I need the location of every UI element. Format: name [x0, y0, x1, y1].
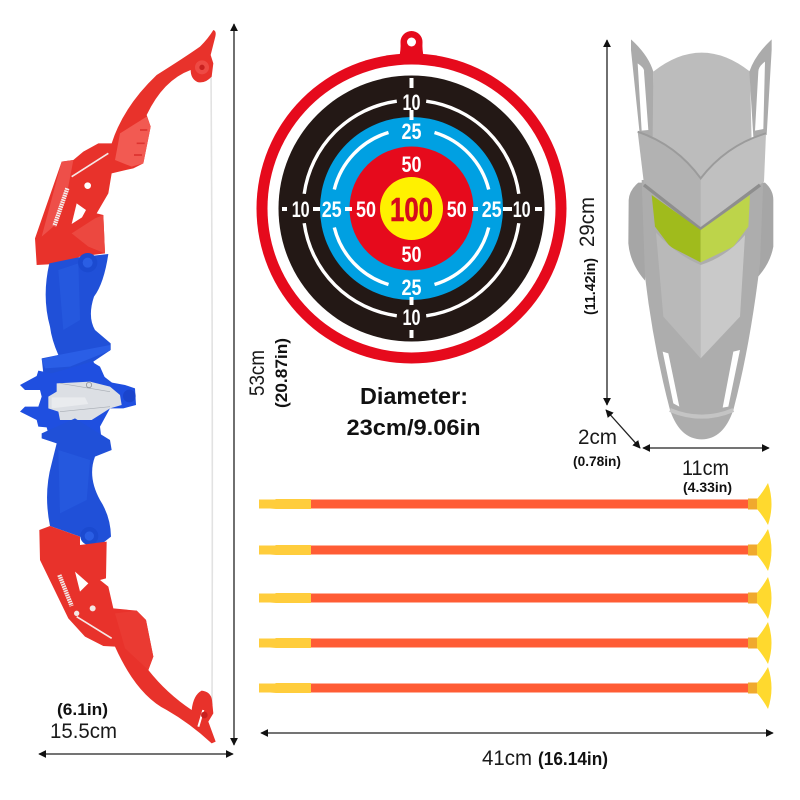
quiver tail band — [670, 410, 733, 417]
arrow: bow height — [233, 24, 235, 745]
label: 16.14in: (16.14in) — [538, 749, 608, 769]
dimension: bow width — [39, 700, 233, 754]
bow lower limb — [39, 526, 216, 743]
arrow 1 — [259, 483, 772, 525]
label: 41cm: 41cm — [482, 747, 532, 770]
label: 11cm: 11cm — [682, 457, 729, 480]
score labels: 50 — [402, 152, 422, 177]
label: 20.87in: (20.87in) — [272, 338, 291, 408]
dimension: bow height — [234, 24, 291, 745]
bow upper grip — [42, 253, 115, 385]
quiver side wings — [628, 183, 773, 281]
quiver lower panel — [656, 233, 745, 358]
arrow: bow width — [39, 753, 233, 755]
quiver body — [642, 180, 763, 439]
dimension: quiver width — [643, 448, 769, 495]
arrow: quiver height — [606, 40, 608, 405]
label: 53cm: 53cm — [246, 350, 269, 396]
score labels: 10 — [292, 197, 310, 222]
quiver back panel — [652, 53, 752, 187]
score labels: 25 — [402, 275, 422, 300]
caption: diameter — [346, 383, 480, 440]
quiver chevron shoulder — [638, 132, 766, 229]
hanger tab — [399, 31, 424, 58]
label: 11.42in: (11.42in) — [582, 258, 599, 315]
label: 15.5cm: 15.5cm — [50, 720, 117, 743]
caption line 2: 23cm/9.06in — [346, 415, 480, 440]
quiver left prong — [631, 39, 653, 137]
arrow 3 — [259, 577, 772, 619]
arrow: quiver depth — [606, 410, 640, 448]
score labels: 25 — [402, 119, 422, 144]
score labels: 25 — [322, 197, 342, 222]
arrows set — [259, 483, 772, 709]
score labels: 50 — [356, 197, 376, 222]
arrow 2 — [259, 529, 772, 571]
arrow: quiver width — [643, 447, 769, 449]
arrow: arrow length — [261, 732, 773, 734]
quiver — [628, 39, 773, 439]
score labels: 10 — [513, 197, 531, 222]
bow lower grip — [42, 418, 112, 547]
label: 29cm: 29cm — [576, 197, 599, 247]
quiver right prong — [749, 39, 772, 137]
label: 4.33in: (4.33in) — [683, 479, 732, 495]
target — [256, 31, 566, 364]
dimension: quiver depth — [573, 410, 640, 469]
score labels: 25 — [482, 197, 502, 222]
score labels: 50 — [402, 242, 422, 267]
bow upper limb — [35, 30, 216, 265]
bow centre riser — [20, 362, 136, 440]
arrow 4 — [259, 622, 772, 664]
score labels: 50 — [447, 197, 467, 222]
label: 6.1in: (6.1in) — [57, 700, 108, 719]
caption line 1: Diameter: — [360, 383, 468, 409]
score labels — [292, 90, 531, 330]
dimension: arrow length — [261, 733, 773, 770]
bow — [20, 30, 216, 743]
label: 2cm: 2cm — [578, 426, 617, 449]
arrow 5 — [259, 667, 772, 709]
quiver green insert — [652, 195, 750, 262]
bow string — [211, 72, 212, 705]
quiver slots — [663, 350, 740, 408]
score labels: 10 — [402, 305, 420, 330]
label: 0.78in: (0.78in) — [573, 453, 621, 469]
rings — [256, 54, 566, 364]
score labels: 10 — [402, 90, 420, 115]
score labels: 100 — [390, 191, 433, 228]
dimension: quiver height — [576, 40, 607, 405]
